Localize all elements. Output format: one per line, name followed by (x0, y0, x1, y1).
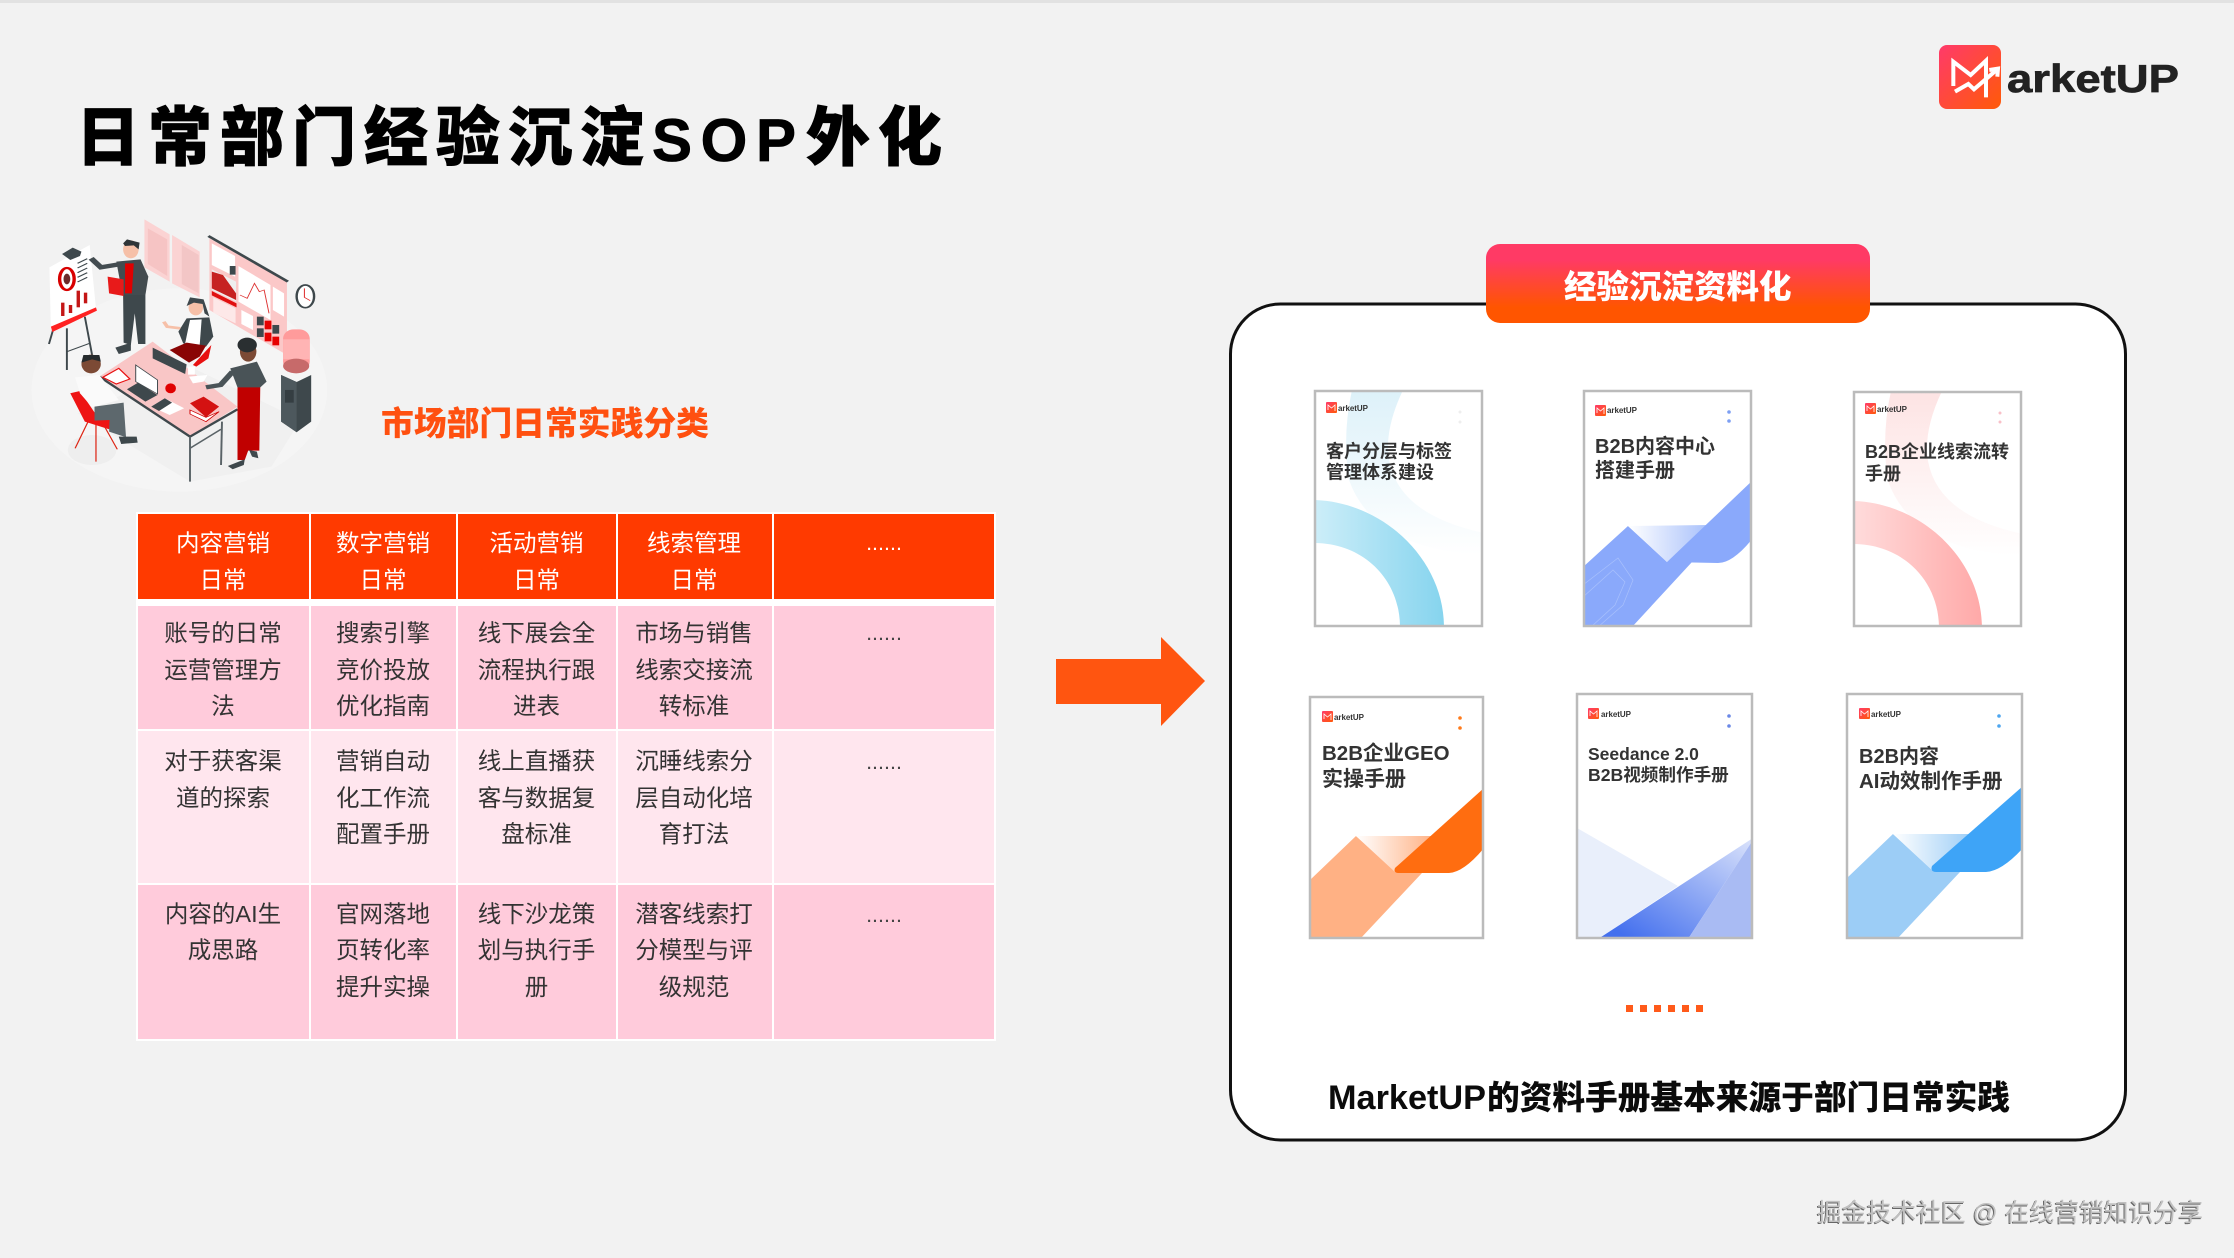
left man (75, 418, 117, 462)
table row 3: 潜客线索打 (635, 901, 753, 927)
table row 2: 营销自动 (336, 748, 430, 774)
card 6: AI motion design: AI动效制作手册 (1859, 770, 2002, 793)
card 2 logo (1595, 405, 1606, 416)
card 1 logo (1326, 402, 1337, 413)
table row 3: 划与执行手 (478, 937, 595, 963)
card 6: AI motion design: arketUP (1871, 710, 1902, 719)
table row 2: 盘标准 (501, 821, 572, 847)
arrow (1056, 637, 1205, 726)
card 3: B2B lead flow: 手册 (1865, 464, 1901, 484)
table row 2: 沉睡线索分 (635, 748, 753, 774)
table row 3: 提升实操 (336, 974, 430, 1000)
card 5 logo (1588, 708, 1599, 719)
table row 1: 运营管理方 (164, 657, 282, 683)
table row 1: 转标准 (659, 693, 729, 719)
table (99, 342, 238, 437)
table row 3: 成思路 (188, 937, 258, 963)
title (76, 102, 950, 174)
subheading: 市场部门日常实践分类 (381, 405, 709, 442)
card 2: B2B content center: arketUP (1607, 406, 1638, 415)
table row 2: 道的探索 (176, 785, 270, 811)
table: marketing daily practices (136, 512, 996, 1041)
card 4 logo (1322, 711, 1333, 722)
table row 1: 优化指南 (336, 693, 430, 719)
table header: 日常 (360, 567, 406, 593)
table row 2: 配置手册 (336, 821, 430, 847)
card 5: Seedance video: Seedance 2.0 (1588, 744, 1699, 764)
table row 3 (138, 885, 994, 1039)
caption: 的资料手册基本来源于部门日常实践 (1487, 1079, 2010, 1116)
table header: ...... (866, 531, 902, 555)
table row 1: 竞价投放 (336, 657, 430, 683)
table row 2: 线上直播获 (478, 748, 595, 774)
logo: MarketUP (1939, 45, 2179, 109)
panel: experience documentation (1230, 244, 2126, 1140)
table row 3: ...... (866, 903, 902, 927)
card 2: B2B content center: B2B内容中心 (1595, 434, 1715, 458)
card 4: B2B GEO: 实操手册 (1322, 767, 1406, 791)
seated woman (193, 345, 211, 367)
card 1: customer segmentation: 客户分层与标签 (1326, 440, 1452, 462)
water cooler (283, 329, 310, 371)
table header: 线索管理 (647, 530, 741, 556)
table row 3: 册 (525, 974, 548, 1000)
table row 2: 对于获客渠 (164, 748, 282, 774)
card 2: B2B content center: 搭建手册 (1595, 459, 1675, 482)
card 6: AI motion design: B2B内容 (1859, 744, 1939, 768)
right woman (238, 386, 260, 460)
caption: MarketUP (1328, 1079, 1486, 1117)
table row 3: 页转化率 (336, 937, 430, 963)
table row 3: 级规范 (659, 974, 729, 1000)
wall panels (144, 219, 170, 282)
card 5: Seedance video: B2B视频制作手册 (1588, 765, 1729, 785)
badge heading (1486, 244, 1870, 323)
card 6 logo (1859, 708, 1870, 719)
card 4: B2B GEO (1309, 697, 1484, 939)
table header: 日常 (513, 567, 560, 593)
table row 2: 育打法 (659, 821, 729, 847)
table row 1: ...... (866, 621, 902, 645)
table row 1: 线索交接流 (635, 657, 753, 683)
card 1: customer segmentation: arketUP (1338, 404, 1369, 413)
title: SOP (652, 107, 796, 174)
table row 3: 官网落地 (336, 901, 430, 927)
table header: 日常 (200, 567, 246, 593)
card 2: B2B content center (1583, 391, 1753, 627)
table header: 数字营销 (336, 530, 430, 556)
card 3 logo (1865, 403, 1876, 414)
table row 1: 账号的日常 (164, 620, 282, 646)
table row 2: ...... (866, 750, 902, 774)
ellipsis dots (1626, 1005, 1703, 1012)
standing man (123, 295, 145, 345)
table row 2 (138, 731, 994, 883)
table row 2: 客与数据复 (478, 785, 595, 811)
table row 1: 进表 (513, 693, 560, 719)
table row 3: 分模型与评 (635, 937, 753, 963)
table header: 日常 (670, 567, 718, 593)
card 5: Seedance video: arketUP (1601, 710, 1632, 719)
table row 1: 法 (211, 693, 235, 719)
card 4: B2B GEO: B2B企业GEO (1322, 741, 1450, 765)
table header (138, 514, 994, 599)
table row 1: 搜索引擎 (336, 620, 430, 646)
clock (297, 285, 314, 308)
table row 1: 市场与销售 (635, 620, 753, 646)
table row 1: 流程执行跟 (478, 657, 595, 683)
table row 1: 线下展会全 (478, 620, 595, 646)
card 4: B2B GEO: arketUP (1334, 713, 1365, 722)
badge heading: 经验沉淀资料化 (1564, 268, 1792, 305)
logo: MarketUP: arketUP (2007, 58, 2179, 101)
title: 日常部门经验沉淀 (76, 102, 652, 174)
table row 2: 化工作流 (336, 785, 430, 811)
card 3: B2B lead flow (1853, 391, 2023, 628)
illustration: team meeting (32, 219, 327, 492)
watermark: 掘金技术社区 @ 在线营销知识分享 (1817, 1199, 2203, 1227)
table row 3: 线下沙龙策 (478, 901, 595, 927)
card 3: B2B lead flow: B2B企业线索流转 (1865, 441, 2009, 462)
flipchart (65, 328, 69, 370)
wall board (209, 238, 287, 355)
table row 1 (138, 606, 994, 729)
table row 2: 层自动化培 (635, 785, 753, 811)
card 5: Seedance video (1576, 694, 1753, 939)
card 1: customer segmentation (1314, 390, 1484, 627)
table header: 活动营销 (490, 530, 584, 556)
table row 3: 内容的AI生 (165, 901, 281, 927)
card 1: customer segmentation: 管理体系建设 (1326, 462, 1434, 482)
table header: 内容营销 (176, 530, 270, 556)
card 3: B2B lead flow: arketUP (1877, 405, 1908, 414)
card 6: AI motion design (1846, 694, 2023, 939)
title: 外化 (806, 102, 950, 174)
